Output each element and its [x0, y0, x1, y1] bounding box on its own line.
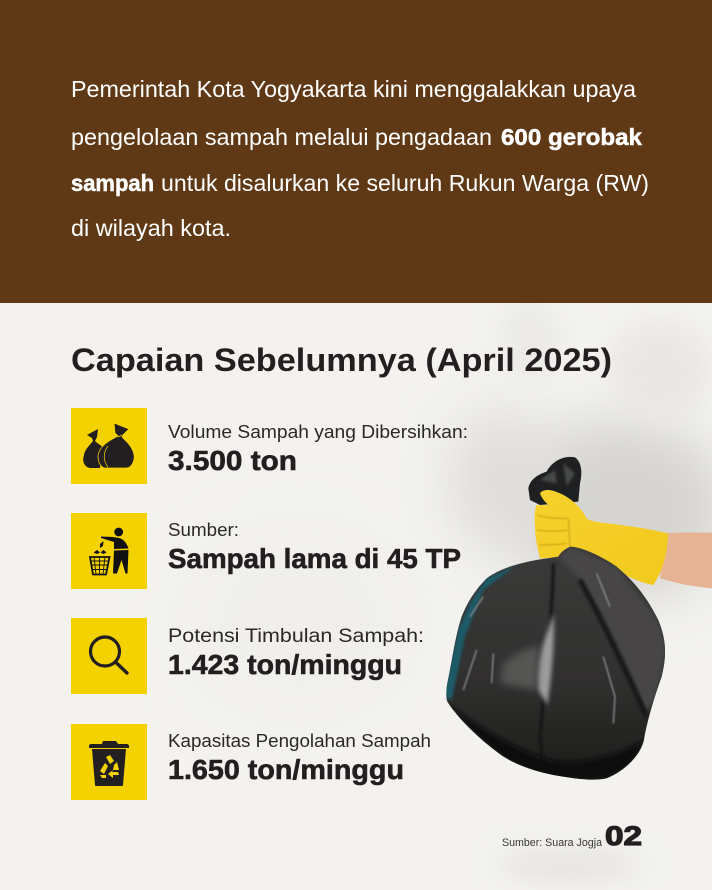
- bag folds and highlights: [558, 547, 667, 713]
- bag knot: [528, 457, 581, 505]
- icon: recycle bin: [71, 724, 147, 800]
- stat row: capacity: [71, 724, 431, 800]
- intro paragraph: 600 gerobak: [501, 124, 642, 150]
- intro paragraph: [71, 76, 649, 241]
- intro paragraph: sampah: [71, 170, 154, 196]
- page number: 02: [605, 821, 642, 851]
- photo: gloved hand holding black trash bag: [443, 457, 712, 780]
- intro paragraph: Pemerintah Kota Yogyakarta kini menggalakkan upaya: [71, 76, 636, 102]
- value: 3.500 ton: [168, 445, 297, 476]
- icon: garbage bags: [71, 408, 147, 484]
- stat row: potential: [71, 618, 424, 694]
- source credit: Sumber: Suara Jogja: [502, 837, 603, 849]
- top brown panel: [0, 0, 712, 303]
- value: 1.423 ton/minggu: [168, 649, 402, 680]
- stat row: source: [71, 513, 461, 589]
- intro paragraph: di wilayah kota.: [71, 215, 231, 241]
- heading: Capaian Sebelumnya (April 2025): [71, 342, 612, 378]
- glove: [535, 490, 668, 585]
- icon: person throwing litter in bin: [71, 513, 147, 589]
- arm: [660, 532, 712, 588]
- label: Sumber:: [168, 519, 239, 540]
- value: Sampah lama di 45 TP: [168, 543, 461, 574]
- label: Potensi Timbulan Sampah:: [168, 626, 424, 647]
- label: Kapasitas Pengolahan Sampah: [168, 730, 431, 751]
- icon: magnifier: [71, 618, 147, 694]
- value: 1.650 ton/minggu: [168, 754, 404, 785]
- label: Volume Sampah yang Dibersihkan:: [168, 421, 468, 442]
- intro paragraph: pengelolaan sampah melalui pengadaan: [71, 124, 492, 150]
- background: textured concrete wall: [445, 321, 712, 879]
- stat row: volume: [71, 408, 468, 484]
- intro paragraph: untuk disalurkan ke seluruh Rukun Warga (RW): [161, 170, 649, 196]
- bag body: [446, 547, 665, 780]
